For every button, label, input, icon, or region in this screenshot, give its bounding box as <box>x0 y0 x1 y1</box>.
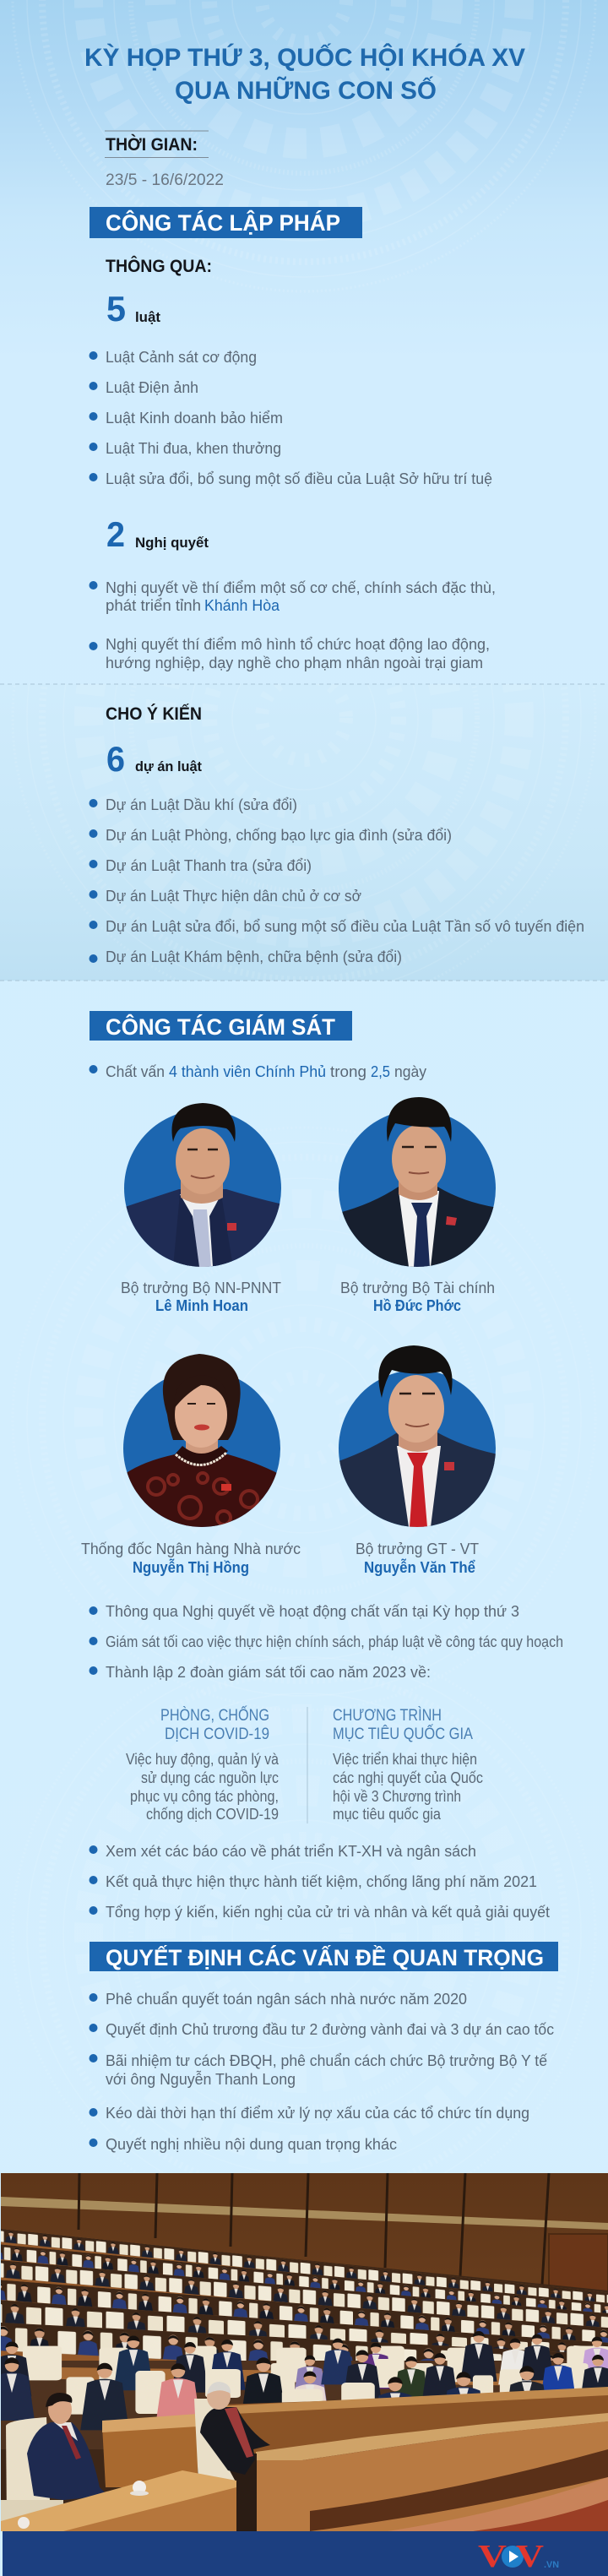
list: 6 draft laws: Dự án Luật Thực hiện dân chủ ở cơ sở <box>106 888 361 905</box>
stat: 2 resolutions: Nghị quyết <box>135 535 209 551</box>
list: decisions: Kéo dài thời hạn thí điểm xử lý nợ xấu của các tổ chức tín dụng <box>106 2105 529 2122</box>
heading: time: THỜI GIAN: <box>106 134 198 155</box>
panel: national target programme delegation: CHƯƠNG TRÌNH <box>333 1707 442 1725</box>
list: 6 draft laws: Dự án Luật Khám bệnh, chữa bệnh (sửa đổi) <box>106 948 402 965</box>
list: 2 resolutions: Khánh Hòa <box>204 597 280 614</box>
title <box>84 43 525 105</box>
panel: covid oversight delegation: PHÒNG, CHỐNG <box>160 1706 269 1725</box>
stat: 6 draft laws <box>106 739 202 779</box>
caption: Nguyễn Thị Hồng <box>81 1541 301 1576</box>
bullet: questioning: Chất vấn <box>106 1063 165 1080</box>
stat: 6 draft laws: dự án luật <box>135 758 202 774</box>
darker band behind the opinions section <box>0 684 608 981</box>
list: 5 laws: Luật Điện ảnh <box>106 379 198 396</box>
stat: 5 laws: luật <box>135 309 160 325</box>
caption: Hồ Đức Phớc: Bộ trưởng Bộ Tài chính <box>340 1280 495 1296</box>
panel: covid oversight delegation: sử dụng các nguồn lực <box>141 1769 279 1786</box>
caption: Lê Minh Hoan <box>121 1280 281 1314</box>
desk behind the front row <box>102 2421 198 2487</box>
list: decisions: Quyết nghị nhiều nội dung quan trọng khác <box>106 2136 397 2153</box>
list: 6 draft laws: Dự án Luật sửa đổi, bổ sung một số điều của Luật Tần số vô tuyến điện <box>106 918 584 935</box>
list: oversight activities: Thông qua Nghị quyết về hoạt động chất vấn tại Kỳ họp thứ 3 <box>106 1603 519 1620</box>
footer bar <box>3 2531 608 2576</box>
stat: 2 resolutions: 2 <box>106 514 125 554</box>
foreground desk <box>1 2470 236 2531</box>
session dates block <box>105 131 224 189</box>
caption: Hồ Đức Phớc: Hồ Đức Phớc <box>373 1297 461 1314</box>
heading: opinions: CHO Ý KIẾN <box>106 704 202 724</box>
list: 6 draft laws <box>90 796 584 965</box>
section heading: oversight: CÔNG TÁC GIÁM SÁT <box>106 1014 335 1040</box>
list: 5 laws: Luật sửa đổi, bổ sung một số điều của Luật Sở hữu trí tuệ <box>106 470 492 487</box>
stat: 5 laws: 5 <box>106 289 126 329</box>
bullet: questioning: 4 thành viên Chính Phủ <box>169 1063 326 1080</box>
list: reports reviewed <box>90 1843 550 1921</box>
panel: national target programme delegation: mục tiêu quốc gia <box>333 1806 442 1823</box>
list: reports reviewed: Tổng hợp ý kiến, kiến nghị của cử tri và nhân và kết quả giải quyết <box>106 1904 550 1921</box>
stat: 6 draft laws: 6 <box>106 739 125 779</box>
list: decisions: Quyết định Chủ trương đầu tư 2 đường vành đai và 3 dự án cao tốc <box>106 2021 554 2038</box>
list: 5 laws: Luật Thi đua, khen thưởng <box>106 440 281 457</box>
section heading: legislation: CÔNG TÁC LẬP PHÁP <box>106 209 340 236</box>
list: oversight activities: Giám sát tối cao việc thực hiện chính sách, pháp luật về công tác quy hoạch <box>106 1633 563 1650</box>
bullet: questioning <box>90 1063 426 1080</box>
caption: Nguyễn Văn Thể <box>356 1541 479 1576</box>
logo: VOV <box>478 2539 559 2574</box>
left gap and chairs <box>228 2454 257 2531</box>
list: 6 draft laws: Dự án Luật Dầu khí (sửa đổi) <box>106 796 297 813</box>
logo: VOV: V <box>478 2539 508 2574</box>
panel: national target programme delegation: các nghị quyết của Quốc <box>333 1769 483 1786</box>
front curved desk <box>256 2413 608 2460</box>
list: 2 resolutions <box>90 579 496 671</box>
title: QUA NHỮNG CON SỐ <box>175 76 437 105</box>
list: decisions <box>90 1991 554 2153</box>
logo: VOV: V <box>516 2539 545 2574</box>
list: oversight activities <box>90 1603 563 1681</box>
caption: Nguyễn Thị Hồng: Nguyễn Thị Hồng <box>133 1558 249 1576</box>
list: 5 laws: Luật Kinh doanh bảo hiểm <box>106 410 283 427</box>
bullet: questioning: trong <box>330 1063 366 1080</box>
stat: 2 resolutions <box>106 514 209 554</box>
panel: national target programme delegation <box>333 1707 483 1823</box>
portrait: Hồ Đức Phớc <box>339 1097 498 1267</box>
list: 5 laws: Luật Cảnh sát cơ động <box>106 349 257 366</box>
heading: passed: THÔNG QUA: <box>106 256 212 276</box>
caption: Nguyễn Văn Thể: Bộ trưởng GT - VT <box>356 1541 479 1557</box>
list: oversight activities: Thành lập 2 đoàn giám sát tối cao năm 2023 về: <box>106 1664 431 1681</box>
list: decisions: Phê chuẩn quyết toán ngân sách nhà nước năm 2020 <box>106 1991 467 2008</box>
panel: covid oversight delegation: Việc huy động, quản lý và <box>126 1751 280 1768</box>
panel: covid oversight delegation: chống dịch COVID-19 <box>146 1806 279 1823</box>
portrait: Lê Minh Hoan <box>122 1103 283 1267</box>
caption: Nguyễn Thị Hồng: Thống đốc Ngân hàng Nhà nước <box>81 1541 301 1557</box>
stat: 5 laws <box>106 289 160 329</box>
list: reports reviewed: Kết quả thực hiện thực hành tiết kiệm, chống lãng phí năm 2021 <box>106 1873 537 1890</box>
panel: national target programme delegation: MỤC TIÊU QUỐC GIA <box>333 1725 473 1743</box>
list: decisions: với ông Nguyễn Thanh Long <box>106 2070 296 2088</box>
panel: covid oversight delegation: phục vụ công tác phòng, <box>130 1788 279 1805</box>
caption: Lê Minh Hoan: Bộ trưởng Bộ NN-PNNT <box>121 1280 281 1296</box>
list: 2 resolutions: hướng nghiệp, dạy nghề cho phạm nhân ngoài trại giam <box>106 655 483 671</box>
front seated delegates <box>27 2422 108 2500</box>
logo: VOV: .VN <box>544 2560 559 2570</box>
list: reports reviewed: Xem xét các báo cáo về phát triển KT-XH và ngân sách <box>106 1843 476 1860</box>
portrait: Nguyễn Thị Hồng <box>123 1354 280 1527</box>
list: 6 draft laws: Dự án Luật Phòng, chống bạo lực gia đình (sửa đổi) <box>106 827 452 844</box>
panel: national target programme delegation: hội về 3 Chương trình <box>333 1788 461 1805</box>
panel: covid oversight delegation: DỊCH COVID-19 <box>165 1725 269 1743</box>
section heading: important decisions: QUYẾT ĐỊNH CÁC VẤN ĐỀ QUAN TRỌNG <box>106 1944 544 1970</box>
portrait: Nguyễn Văn Thể <box>339 1345 498 1527</box>
list: 5 laws <box>90 349 492 487</box>
caption: Hồ Đức Phớc <box>340 1280 495 1314</box>
bullet: questioning: ngày <box>394 1063 426 1080</box>
dates: 23/5 - 16/6/2022 <box>106 171 224 189</box>
photo: National Assembly hall <box>0 2173 608 2531</box>
panel: national target programme delegation: Việc triển khai thực hiện <box>333 1751 477 1768</box>
caption: Nguyễn Văn Thể: Nguyễn Văn Thể <box>364 1558 475 1576</box>
bullet: questioning: 2,5 <box>371 1063 390 1080</box>
list: 6 draft laws: Dự án Luật Thanh tra (sửa đổi) <box>106 857 312 874</box>
panel: covid oversight delegation <box>126 1706 280 1823</box>
caption: Lê Minh Hoan: Lê Minh Hoan <box>155 1297 248 1314</box>
list: 2 resolutions: Nghị quyết về thí điểm một số cơ chế, chính sách đặc thù, <box>106 579 496 596</box>
list: decisions: Bãi nhiệm tư cách ĐBQH, phê chuẩn cách chức Bộ trưởng Bộ Y tế <box>106 2052 547 2069</box>
title: KỲ HỌP THỨ 3, QUỐC HỘI KHÓA XV <box>84 43 525 72</box>
list: 2 resolutions: Nghị quyết thí điểm mô hình tổ chức hoạt động lao động, <box>106 636 490 653</box>
list: 2 resolutions: phát triển tỉnh <box>106 597 201 614</box>
